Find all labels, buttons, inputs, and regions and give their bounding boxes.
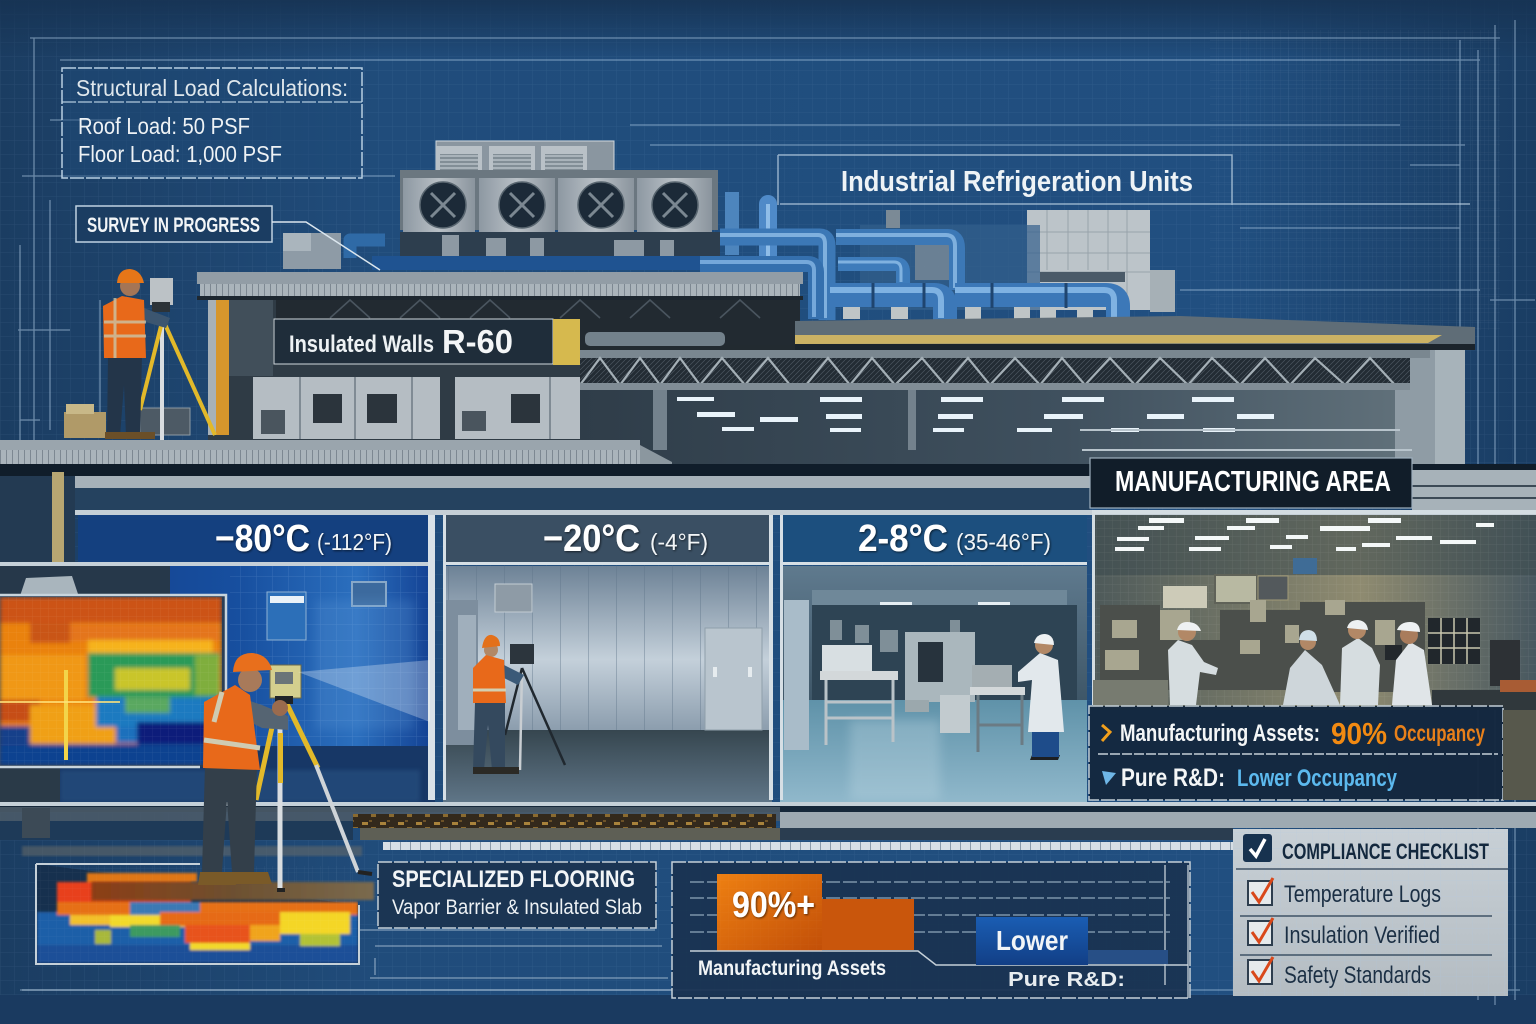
temperature heading: minus 20 (543, 518, 708, 560)
air handling units (253, 377, 580, 439)
label: industrial refrigeration units: Industrial Refrigeration Units (841, 166, 1193, 198)
text: manufacturing assets occupancy (1120, 716, 1485, 751)
text: floor load: Floor Load: 1,000 PSF (78, 141, 282, 167)
chart: thermal scan of floor slab (36, 864, 359, 964)
bar: pure r&d: Lower (996, 925, 1068, 956)
bar: manufacturing assets: 90%+ (732, 884, 815, 925)
temperature heading: minus 80: (-112°F) (317, 529, 392, 555)
item: insulation verified: Insulation Verified (1284, 922, 1440, 949)
heading: specialized flooring: SPECIALIZED FLOORING (392, 866, 635, 893)
temperature heading: minus 80 (215, 518, 392, 560)
heading: structural load calculations: Structural Load Calculations: (76, 75, 348, 101)
lab bench (820, 645, 1025, 752)
temperature heading: minus 20: −20°C (543, 518, 640, 560)
panel: minus 80 degree freezer (0, 515, 435, 802)
icon: orange chevron (1102, 725, 1110, 741)
text: pure r&d occupancy: Pure R&D: (1121, 764, 1225, 792)
people: lab workers (1168, 620, 1432, 705)
rooftop equipment block (860, 210, 1175, 312)
panel: compliance checklist (1233, 829, 1508, 996)
right roof slab (795, 316, 1475, 350)
person: foreground surveyor with total station (198, 653, 430, 892)
text: roof load: Roof Load: 50 PSF (78, 113, 250, 139)
label: insulated walls R-60: Insulated Walls (289, 331, 434, 358)
text: manufacturing assets occupancy: 90% (1331, 716, 1387, 751)
temperature heading: 2 to 8: (35-46°F) (956, 529, 1051, 555)
label: manufacturing area (1090, 458, 1412, 508)
floor slab section (0, 802, 1536, 856)
label: survey in progress (76, 206, 272, 242)
icon: wall insulation section (553, 319, 580, 365)
chart: occupancy bars (672, 862, 1190, 998)
icon: blue triangle (1102, 771, 1116, 785)
icon: condenser fans (420, 182, 698, 228)
person: lab worker (1018, 634, 1064, 760)
label: pure r&d: Pure R&D: (1008, 969, 1125, 991)
panel: 2 to 8 degree cold room (780, 515, 1087, 802)
arrow: survey leader line (272, 222, 380, 270)
text: vapor barrier and insulated slab: Vapor Barrier & Insulated Slab (392, 896, 642, 919)
ceiling lights (677, 397, 1274, 432)
label: manufacturing assets: Manufacturing Assets (698, 957, 886, 980)
decorative slab measurement lines (22, 930, 672, 990)
temperature heading: minus 80: −80°C (215, 518, 310, 560)
label: survey in progress: SURVEY IN PROGRESS (87, 214, 260, 237)
item: insulation verified (1248, 918, 1440, 949)
item: temperature logs: Temperature Logs (1284, 881, 1441, 908)
building roof and structure (197, 272, 1475, 470)
freezer door (705, 628, 762, 730)
temperature heading: 2 to 8 (858, 518, 1051, 560)
text: manufacturing assets occupancy: Manufacturing Assets: (1120, 720, 1320, 747)
panel: specialized flooring (378, 862, 656, 928)
bar: manufacturing assets (717, 874, 914, 951)
text: manufacturing assets occupancy: Occupancy (1394, 720, 1485, 746)
item: safety standards: Safety Standards (1284, 962, 1431, 989)
panel: minus 20 degree freezer (443, 515, 773, 802)
panel: occupancy callout (1089, 706, 1536, 800)
icon: wall vent (20, 576, 78, 596)
refrigeration piping (350, 192, 1118, 320)
person: surveyor in freezer (473, 635, 565, 774)
person: rooftop surveyor with total station (64, 269, 215, 440)
roof truss (580, 358, 1410, 390)
icon: header check (1243, 834, 1272, 862)
text: pure r&d occupancy: Lower Occupancy (1237, 765, 1398, 792)
label: manufacturing area: MANUFACTURING AREA (1115, 466, 1391, 498)
ceiling lights (1115, 518, 1494, 551)
floor platform under surveyor (92, 882, 374, 900)
laser beam (298, 660, 430, 722)
left interior (208, 300, 800, 440)
lower floor edge (0, 440, 1536, 566)
rooftop condenser units (283, 141, 720, 269)
label: insulated walls R-60: R-60 (442, 323, 513, 360)
temperature heading: minus 20: (-4°F) (650, 529, 708, 555)
text: pure r&d occupancy (1121, 764, 1398, 792)
chart: thermal scan of freezer wall (0, 595, 226, 767)
panel: structural load calculations (62, 68, 362, 178)
item: safety standards (1248, 957, 1431, 989)
bar: pure r&d (976, 917, 1168, 965)
temperature heading: 2 to 8: 2-8°C (858, 518, 948, 560)
label: industrial refrigeration units (778, 155, 1470, 205)
item: temperature logs (1248, 878, 1441, 908)
label: insulated walls R-60 (274, 319, 580, 365)
panel: manufacturing floor (1092, 510, 1536, 710)
left roof eave (197, 272, 803, 300)
right interior (580, 332, 1465, 470)
